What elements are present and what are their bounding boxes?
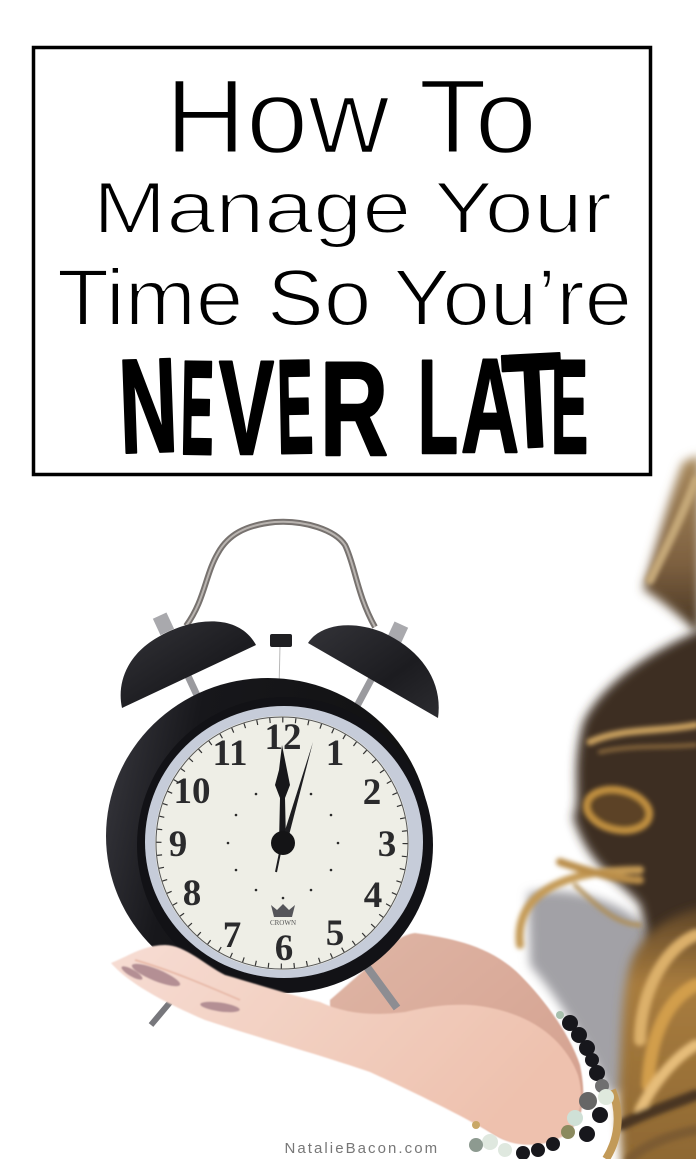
dial numbers: 12 <box>264 717 302 758</box>
heading: NEVER LATE: T <box>499 325 567 477</box>
shirt <box>528 891 650 1095</box>
heading: Manage Your: Manage Your <box>93 168 612 249</box>
clock inner rim <box>145 706 423 978</box>
dial numbers: 10 <box>174 771 210 812</box>
heading: NEVER LATE <box>117 325 588 484</box>
dial numbers: 11 <box>213 733 247 774</box>
alarm clock <box>106 522 439 1025</box>
right bell <box>308 625 439 718</box>
heading: NEVER LATE: L <box>418 333 458 482</box>
bell handle <box>186 522 375 627</box>
title box: E <box>551 333 588 482</box>
dial numbers: 8 <box>183 873 201 914</box>
bell posts <box>188 676 372 706</box>
dial numbers: 6 <box>275 928 293 969</box>
hair: dark middle mass <box>573 626 696 950</box>
photo: hand back, behind the clock <box>330 933 583 1144</box>
gold bangle <box>606 1090 618 1159</box>
left bell <box>121 621 256 708</box>
dial numbers: 4 <box>364 875 382 916</box>
clock outer ring <box>137 697 433 993</box>
dial numbers: 1 <box>326 733 344 774</box>
heading: NEVER LATE: E <box>180 334 215 483</box>
clock legs <box>151 967 397 1025</box>
crown logo <box>270 904 296 927</box>
heading: How To: How To <box>165 58 537 176</box>
heading: NEVER LATE: N <box>117 331 180 482</box>
title box <box>34 48 650 484</box>
clock body <box>106 678 430 994</box>
clock hands <box>271 742 313 872</box>
heading: Time So You're: Time So You’re <box>57 253 632 342</box>
dial numbers: 3 <box>378 824 396 865</box>
hand: fingernails <box>120 960 240 1014</box>
dial numbers: 7 <box>223 915 241 956</box>
dial minute dots <box>227 793 339 899</box>
bell knobs <box>153 612 408 644</box>
heading: NEVER LATE: V <box>219 334 274 483</box>
hair: golden lower mass <box>618 905 696 1159</box>
dial numbers: 2 <box>363 772 381 813</box>
crown logo: CROWN <box>270 919 296 927</box>
photo: fingers in front of the clock <box>111 945 581 1145</box>
hair: upper lock <box>643 455 696 636</box>
dial numbers <box>169 717 396 969</box>
dial numbers: 9 <box>169 824 187 865</box>
hammer <box>270 634 292 690</box>
hand: finger shading <box>135 960 240 1000</box>
beads <box>469 1011 614 1159</box>
heading: NEVER LATE: E <box>276 333 314 482</box>
hair: golden strands <box>519 480 696 1159</box>
dial numbers: 5 <box>326 913 344 954</box>
clock dial <box>155 716 409 970</box>
footer website credit: NatalieBacon.com <box>284 1140 438 1157</box>
bracelet <box>469 1011 618 1159</box>
heading: NEVER LATE: R <box>320 335 388 484</box>
heading: NEVER LATE: A <box>461 332 519 481</box>
hair and shirt <box>519 455 696 1159</box>
